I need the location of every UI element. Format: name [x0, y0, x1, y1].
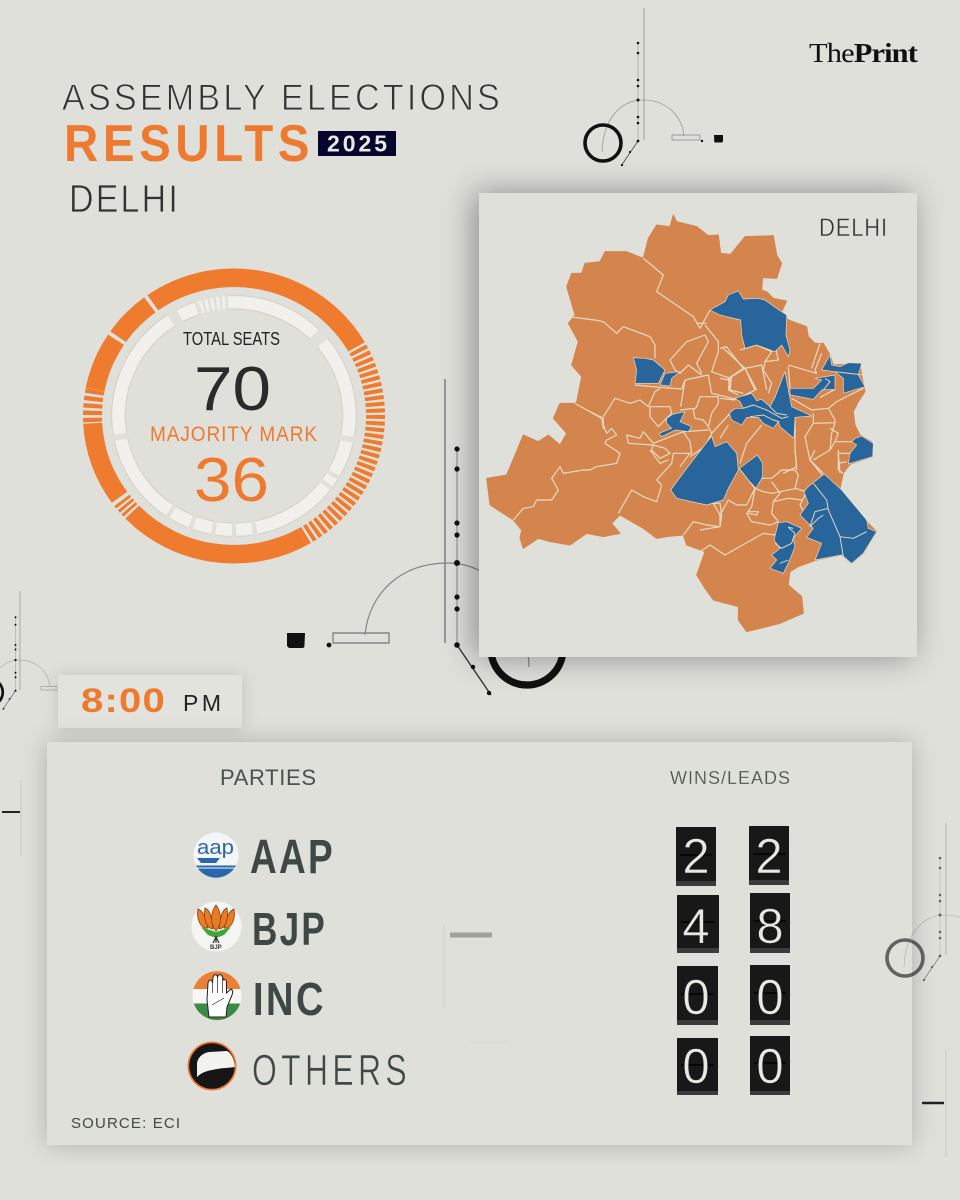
icon: AAP logo: aap [197, 837, 234, 859]
digit card: INC units: 0 [756, 971, 784, 1025]
panel: party results table [47, 742, 912, 1145]
constituency boundaries: central west [590, 323, 755, 480]
orange BJP base territory [487, 215, 877, 632]
total seats label: TOTAL SEATS [183, 329, 280, 349]
icon: BJP lotus logo: BJP [210, 945, 222, 951]
time suffix: PM [183, 690, 221, 716]
digit card: BJP tens: 4 [682, 900, 710, 954]
year badge: 2025 [327, 130, 387, 156]
title: Assembly Elections: ASSEMBLY ELECTIONS [62, 76, 503, 118]
majority mark value: 36 [194, 446, 269, 515]
decoration: centre technical motif [287, 379, 563, 695]
digit card: Others units: 0 [756, 1040, 784, 1094]
source note: SOURCE: ECI [71, 1115, 180, 1132]
constituency boundaries: central east [720, 343, 863, 477]
outer orange ring segments [34, 221, 434, 611]
map of Delhi constituencies [487, 215, 877, 632]
digit card: AAP tens: 2 [682, 830, 710, 884]
seat ring gauge [34, 221, 434, 611]
column heading: wins and leads: WINS/LEADS [670, 768, 790, 788]
icon: INC hand logo [192, 971, 242, 1020]
decoration: right technical motif [887, 823, 960, 981]
row: AAP [194, 831, 335, 884]
inner pale ring segments [71, 256, 397, 576]
icon: Others logo [188, 1042, 236, 1090]
party name: AAP: AAP [250, 831, 335, 884]
decoration: faded dash inside table [444, 925, 510, 1042]
party name: Others: OTHERS [252, 1046, 411, 1095]
column heading: parties: PARTIES [220, 765, 316, 790]
digit card: BJP units: 8 [756, 900, 784, 954]
digit card: Others tens: 0 [682, 1040, 710, 1094]
decoration: right dash [922, 1050, 946, 1157]
map label: DELHI [819, 214, 888, 242]
majority mark label: MAJORITY MARK [150, 423, 318, 446]
flip counter: INC [677, 965, 790, 1025]
panel: time stamp [58, 675, 242, 728]
total seats value: 70 [194, 355, 271, 424]
party name: INC: INC [253, 973, 326, 1025]
decoration: top technical motif [585, 8, 723, 166]
row: BJP [192, 902, 327, 955]
row: INC [192, 971, 326, 1025]
flip counter: BJP [677, 893, 790, 954]
decoration: left technical motif [0, 591, 79, 710]
constituency boundaries: south east [700, 450, 847, 530]
logo: ThePrint: ThePrint [809, 37, 919, 68]
decoration: left dash [2, 780, 21, 856]
digit card: AAP units: 2 [755, 830, 783, 884]
flip counter: AAP [676, 826, 789, 886]
panel: Delhi map card [479, 193, 917, 657]
flip counter: Others [677, 1036, 790, 1095]
digit card: INC tens: 0 [682, 971, 710, 1025]
blue AAP seats [633, 291, 877, 573]
subtitle: Delhi: DELHI [69, 178, 180, 221]
time value: 8:00 [81, 682, 166, 720]
title: Results: RESULTS [64, 115, 314, 173]
row: Others [188, 1042, 411, 1095]
party name: BJP: BJP [252, 903, 327, 955]
boundaries inside blue seats [743, 372, 867, 563]
icon: AAP logo [194, 832, 238, 878]
constituency boundaries: west [513, 258, 775, 555]
